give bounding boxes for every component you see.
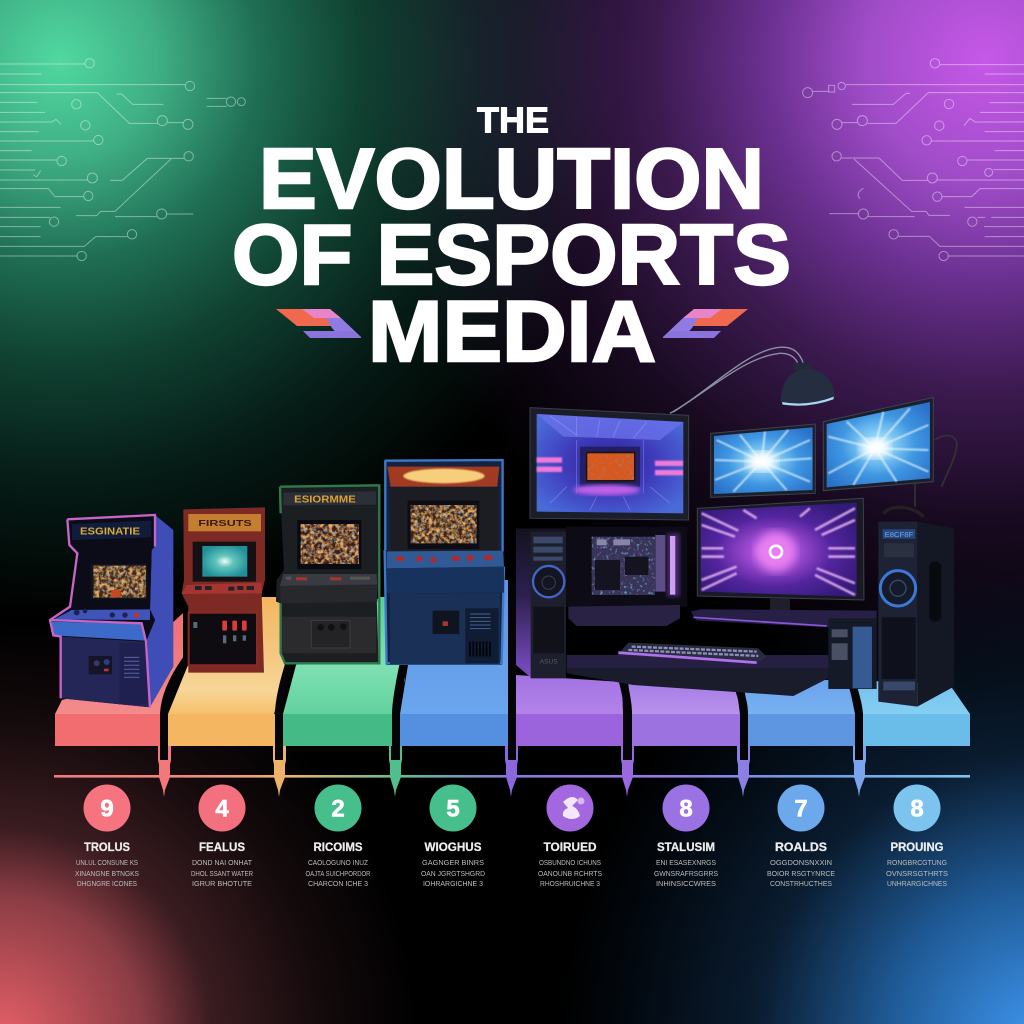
label 5: TOIRUED [544, 842, 596, 854]
pin 2 [273, 746, 286, 797]
description 3: CHARCON ICHE 3 [308, 879, 368, 888]
segment 7 blue [743, 680, 855, 746]
segment 5 purple [516, 675, 623, 746]
description 6: INHINSICCWRES [656, 879, 716, 888]
description 6 [654, 858, 718, 888]
number badge 6: 8 [679, 796, 693, 822]
description 1 [75, 858, 139, 888]
description 2: DOND NAI ONHAT [192, 858, 252, 867]
description 3: CAOLOGUNO INUZ [308, 858, 368, 867]
number badge 8: 8 [910, 796, 924, 822]
cabinet 2 red: FIRSUTS [198, 518, 252, 528]
description 8 [886, 858, 948, 888]
number badge 1: 9 [100, 796, 114, 822]
description 2: IGRUR BHOTUTE [192, 879, 252, 888]
label 2: FEALUS [199, 842, 245, 854]
description 7: BOIOR RSGTYNRCE [767, 869, 835, 878]
pin 3 [389, 746, 402, 797]
step 6: STALUSIM [654, 784, 718, 888]
description 2: DHOL SSANT WATER [191, 869, 253, 878]
title: OF ESPORTS [232, 208, 791, 303]
description 4: GAGNGER BINRS [422, 858, 484, 867]
cabinet 1 purple: ESGINATIE [80, 526, 141, 537]
description 1: UNLUL CONSUNE KS [76, 858, 138, 867]
title: MEDIA [368, 284, 656, 380]
arcade cabinets [50, 460, 504, 707]
PC tower left: ASUS [540, 658, 558, 665]
description 5: RHOSHRUICHNE 3 [540, 879, 600, 888]
monitor: retro arena [530, 408, 689, 520]
step 2: FEALUS [191, 784, 253, 888]
step 4: WIOGHUS [421, 784, 485, 888]
description 2 [191, 858, 253, 888]
step 7: ROALDS [767, 784, 835, 888]
description 7: CONSTRHUCTHES [770, 879, 832, 888]
pin 7 [853, 746, 866, 797]
step 8: PROUING [886, 784, 948, 888]
title: THE [477, 100, 549, 140]
description 5 [538, 858, 602, 888]
description 4: IOHRARGICHNE 3 [423, 879, 483, 888]
open PC case [566, 527, 687, 607]
icon badge 5 [546, 784, 594, 832]
label 6: STALUSIM [657, 842, 715, 854]
segment 8 cyan [855, 680, 970, 746]
segment 6 lilac [628, 682, 740, 746]
description 6: GWNSRAFRSGRRS [654, 869, 718, 878]
title: EVOLUTION [259, 132, 764, 227]
cabinet 3 green: ESIORMME [294, 495, 356, 506]
monitor: blue burst one [711, 424, 815, 497]
step 1: TROLUS [75, 784, 139, 888]
chevron icon right [663, 309, 748, 338]
monitor: blue burst two [823, 397, 957, 507]
PC tower right [878, 507, 954, 707]
description 5: OSBUNDNO ICHUNS [539, 858, 601, 867]
circuit pattern right [803, 59, 1024, 261]
description 4 [421, 858, 485, 888]
description 1: DHGNGRE ICONES [77, 879, 137, 888]
cabinet 2 red [182, 507, 265, 673]
description 3 [306, 858, 371, 888]
description 8: UNHRARGICHNES [887, 879, 947, 888]
description 6: ENI ESASEXNRGS [656, 858, 716, 867]
description 4: OAN JGRGTSHGRD [421, 869, 485, 878]
segment 4 blue [400, 580, 508, 746]
desk base [567, 655, 828, 696]
PC gaming setup [516, 347, 957, 707]
number badge 7: 7 [794, 796, 808, 822]
desk lamp [670, 347, 835, 413]
step 3: RICOIMS [306, 784, 371, 888]
step 5: TOIRUED [538, 784, 602, 888]
PC tower right: E8CF8F [885, 530, 914, 539]
description 3: OAJTA SUICHPORDOR [306, 869, 371, 878]
small PC units [828, 618, 877, 689]
number badge 3: 2 [331, 796, 345, 822]
description 8: OVNSRSGTHRTS [886, 869, 948, 878]
pin 5 [621, 746, 634, 797]
keyboard [617, 643, 767, 664]
label 1: TROLUS [84, 842, 130, 854]
timeline line with pins [54, 746, 970, 797]
pin 6 [737, 746, 750, 797]
description 8: RONGBRCGTUNG [887, 858, 947, 867]
description 7: OGGDONSNXXIN [770, 858, 832, 867]
pin 1 [158, 746, 171, 797]
label 4: WIOGHUS [424, 842, 482, 854]
number badge 2: 4 [215, 796, 229, 822]
pin 4 [505, 746, 518, 797]
cabinet 4 blue [384, 460, 504, 665]
segment 2 yellow [168, 597, 288, 746]
description 1: XINANGNE BTNGKS [75, 869, 139, 878]
label 7: ROALDS [775, 842, 827, 854]
chevron icon left [276, 309, 361, 338]
PC tower left [516, 528, 566, 678]
cabinet 1 purple [50, 515, 173, 707]
segment 3 green [283, 597, 405, 746]
segment 1 red [55, 613, 183, 746]
label 8: PROUING [890, 842, 944, 854]
description 5: OANOUNB RCHRTS [538, 869, 602, 878]
shelves [568, 605, 877, 627]
title [232, 100, 791, 380]
label 3: RICOIMS [314, 842, 363, 854]
separator channels [164, 580, 859, 760]
description 7 [767, 858, 835, 888]
circuit pattern left [0, 59, 245, 261]
cabinet 3 green [276, 485, 379, 664]
monitor: purple warp [697, 498, 864, 612]
number badge 4: 5 [446, 796, 460, 822]
timeline platform [55, 580, 970, 746]
